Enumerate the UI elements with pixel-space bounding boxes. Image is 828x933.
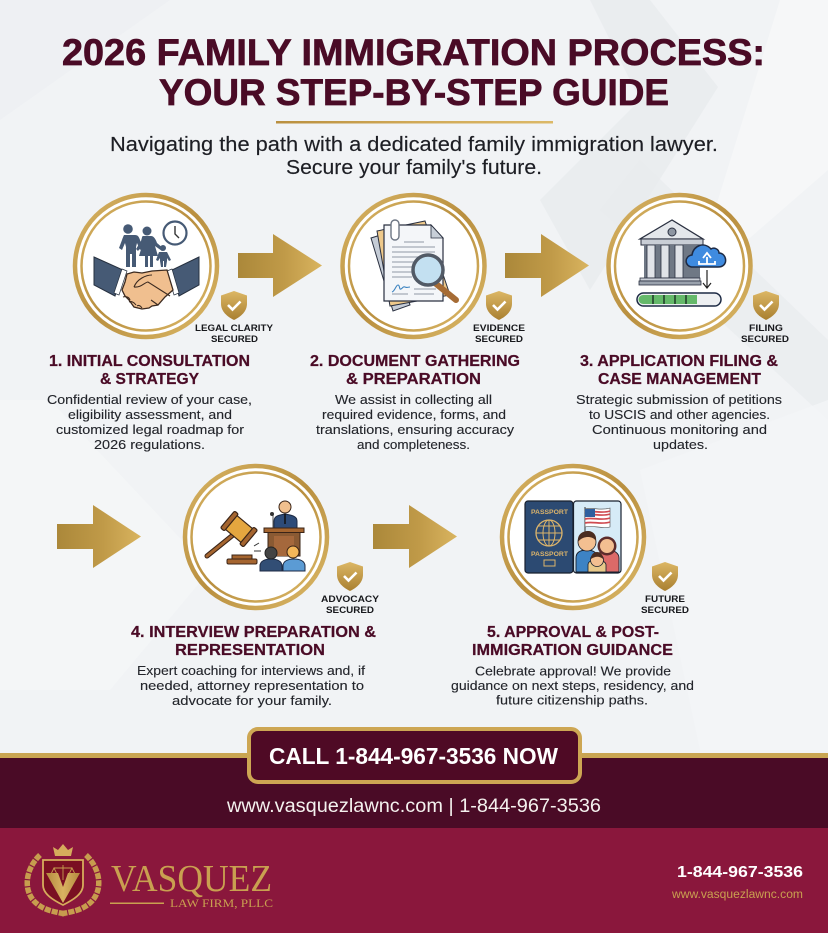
description: translations, ensuring accuracy	[316, 422, 515, 437]
description: eligibility assessment, and	[68, 407, 232, 422]
footer phone: 1-844-967-3536	[677, 864, 803, 881]
title: YOUR STEP-BY-STEP GUIDE	[159, 72, 669, 113]
icon: passport and family: PASSPORT	[531, 509, 568, 516]
description	[47, 392, 252, 452]
badge label: SECURED	[641, 605, 689, 616]
logo	[27, 844, 273, 914]
icon: courthouse, cloud upload and progress bar	[608, 195, 750, 337]
badge label	[195, 323, 274, 345]
subtitle: Secure your family's future.	[286, 156, 542, 179]
contact band	[0, 729, 828, 828]
description: customized legal roadmap for	[56, 422, 245, 437]
panel: step 4 interview preparation	[131, 466, 380, 708]
description: and completeness.	[357, 437, 470, 452]
title	[62, 32, 765, 113]
icon: crown	[53, 844, 73, 856]
arrow: step 2 to 3	[505, 234, 589, 297]
call button: CALL 1-844-967-3536 NOW	[269, 743, 558, 769]
heading	[580, 353, 778, 388]
badge label	[473, 323, 525, 345]
panel: step 2 document gathering	[310, 195, 525, 452]
icon: V monogram	[46, 873, 80, 903]
icon: passport and family: PASSPORT	[531, 551, 568, 558]
badge label: EVIDENCE	[473, 323, 525, 334]
badge label	[741, 323, 789, 345]
subtitle: Navigating the path with a dedicated family immigration lawyer.	[110, 133, 718, 156]
description: 2026 regulations.	[94, 437, 205, 452]
icon: scales	[51, 865, 75, 880]
description	[451, 664, 694, 708]
heading	[49, 353, 250, 388]
icon: badge shield	[486, 291, 512, 320]
arrow: step 1 to 2	[238, 234, 322, 297]
heading: 5. APPROVAL & POST-	[487, 624, 659, 641]
heading: 2. DOCUMENT GATHERING	[310, 353, 520, 370]
badge label	[321, 594, 380, 616]
icon: passport and family	[502, 466, 644, 608]
icon: documents and magnifier	[342, 195, 484, 337]
badge label	[641, 594, 689, 616]
icon: family and handshake	[75, 195, 217, 337]
description	[137, 663, 365, 708]
description: Continuous monitoring and	[592, 422, 767, 437]
badge label: SECURED	[741, 334, 789, 345]
description: advocate for your family.	[172, 693, 332, 708]
arrow: step 4 to 5	[373, 505, 457, 568]
panel: step 1 initial consultation	[47, 195, 274, 452]
badge label: SECURED	[326, 605, 374, 616]
badge label: ADVOCACY	[321, 594, 380, 605]
panel: step 5 approval	[451, 466, 694, 708]
icon: badge shield	[652, 562, 678, 591]
description: We assist in collecting all	[335, 392, 492, 407]
badge label: SECURED	[475, 334, 523, 345]
footer website: www.vasquezlawnc.com	[671, 889, 803, 901]
icon: badge shield	[753, 291, 779, 320]
heading	[472, 624, 673, 659]
description: required evidence, forms, and	[322, 407, 506, 422]
arrow: into step 4	[57, 505, 141, 568]
icon: gavel and podium	[185, 466, 327, 608]
badge label: SECURED	[211, 334, 258, 345]
contact line: www.vasquezlawnc.com | 1-844-967-3536	[226, 796, 601, 817]
description: Celebrate approval! We provide	[475, 664, 671, 678]
badge label: FILING	[749, 323, 783, 334]
icon: shield	[43, 860, 83, 905]
description: needed, attorney representation to	[140, 678, 364, 693]
heading	[310, 353, 520, 388]
icon: badge shield	[337, 562, 363, 591]
description: Expert coaching for interviews and, if	[137, 663, 365, 678]
icon: badge shield	[221, 291, 247, 320]
description: updates.	[653, 437, 708, 452]
footer	[0, 828, 828, 933]
description: Strategic submission of petitions	[576, 392, 783, 407]
description: guidance on next steps, residency, and	[451, 678, 694, 693]
heading: REPRESENTATION	[175, 642, 325, 659]
heading: 4. INTERVIEW PREPARATION &	[131, 624, 376, 641]
heading: & STRATEGY	[100, 371, 199, 388]
call button	[249, 729, 580, 782]
badge label: FUTURE	[645, 594, 685, 605]
description	[576, 392, 783, 452]
firm suffix: LAW FIRM, PLLC	[170, 896, 273, 910]
firm name: VASQUEZ	[111, 858, 272, 900]
description: Confidential review of your case,	[47, 392, 252, 407]
panel: step 3 application filing	[576, 195, 789, 452]
heading: CASE MANAGEMENT	[598, 371, 761, 388]
icon: laurel wreath	[27, 855, 99, 914]
title: 2026 FAMILY IMMIGRATION PROCESS:	[62, 32, 765, 73]
description: future citizenship paths.	[496, 692, 648, 708]
heading: IMMIGRATION GUIDANCE	[472, 642, 673, 659]
badge label: LEGAL CLARITY	[195, 323, 274, 334]
heading: & PREPARATION	[346, 371, 481, 388]
description	[316, 392, 515, 452]
heading	[131, 624, 376, 659]
description: to USCIS and other agencies.	[589, 407, 770, 422]
heading: 1. INITIAL CONSULTATION	[49, 353, 250, 370]
subtitle	[110, 133, 718, 179]
heading: 3. APPLICATION FILING &	[580, 353, 778, 370]
